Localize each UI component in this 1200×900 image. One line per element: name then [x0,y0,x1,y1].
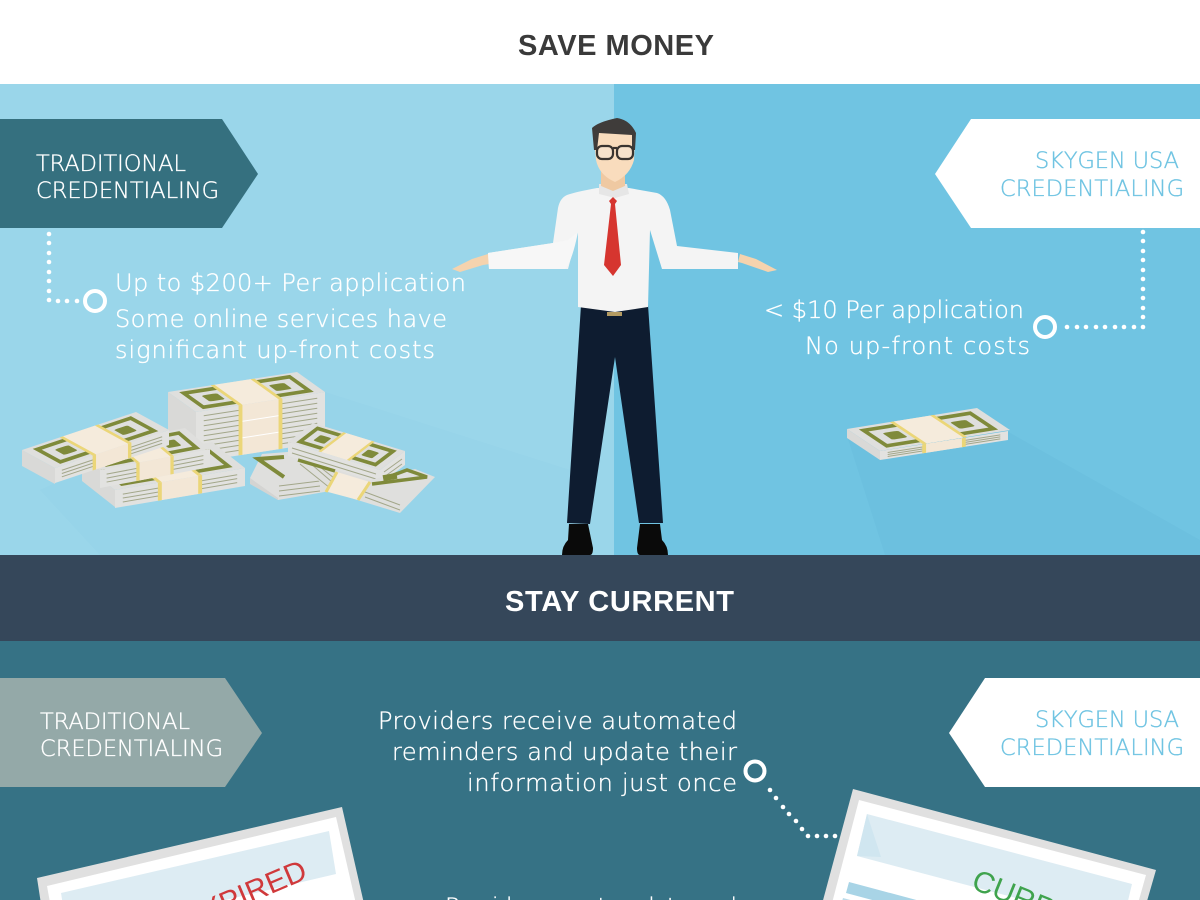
right lower-left bundle [250,450,336,500]
shoes [562,524,668,555]
skygen cost text: No up-front costs [805,332,1030,360]
traditional cost text: Some online services have [115,305,447,333]
header: save money: SAVE MONEY [518,30,714,62]
trousers [567,305,663,524]
hair [592,118,636,150]
header band: stay current: STAY CURRENT [505,586,734,618]
traditional credentialing arrow [0,119,258,228]
rear left bundle [75,449,100,488]
front left bundle [22,450,55,484]
traditional credentialing arrow, lower [0,678,262,787]
dotted connector: traditional cost [47,232,105,311]
traditional credentialing arrow: CREDENTIALING [36,178,219,204]
skygen credentialing arrow: CREDENTIALING [1000,176,1184,202]
traditional credentialing arrow, lower: TRADITIONAL [40,709,190,735]
traditional credentialing arrow: TRADITIONAL [36,151,186,177]
skygen cost text [764,296,1030,360]
skygen credentialing arrow [935,119,1200,228]
neck and head [601,170,625,191]
dotted connector: reminders [746,762,837,838]
skygen credentialing arrow: SKYGEN USA [1035,148,1179,174]
skygen reminder text: Providers receive automated [378,707,737,735]
skygen reminder text: information just once [467,769,737,797]
illustration: man with outstretched arms [452,118,777,555]
lower front bundle [82,464,115,507]
skygen reminder text [378,707,737,797]
skygen credentialing arrow, lower: SKYGEN USA [1035,707,1179,733]
hands [452,254,777,272]
shirt [488,188,738,312]
document: current [815,789,1156,900]
traditional cost text: Up to $200+ Per application [115,269,466,297]
header band: stay current [0,555,1200,641]
skygen credentialing arrow, lower [949,678,1200,787]
right upper bundle [288,442,405,484]
document: expired [37,807,370,900]
glasses [597,146,633,159]
centre stack [168,392,196,457]
illustration: single money bundle [847,408,1200,555]
panel: save money comparison [0,84,1200,555]
header: save money [0,0,1200,84]
right front bundle [297,457,435,513]
panel: stay current comparison [0,641,1200,900]
traditional cost text: significant up-front costs [115,336,435,364]
skygen reminder text: reminders and update their [392,738,737,766]
skygen cost text: < $10 Per application [764,296,1024,324]
skygen credentialing arrow, lower: CREDENTIALING [1000,735,1184,761]
traditional cost text [115,269,466,364]
traditional credentialing arrow, lower: CREDENTIALING [40,736,223,762]
illustration: pile of money [22,372,570,555]
dotted connector: skygen cost [1035,230,1145,337]
belt buckle [607,312,622,316]
tie [604,197,621,276]
